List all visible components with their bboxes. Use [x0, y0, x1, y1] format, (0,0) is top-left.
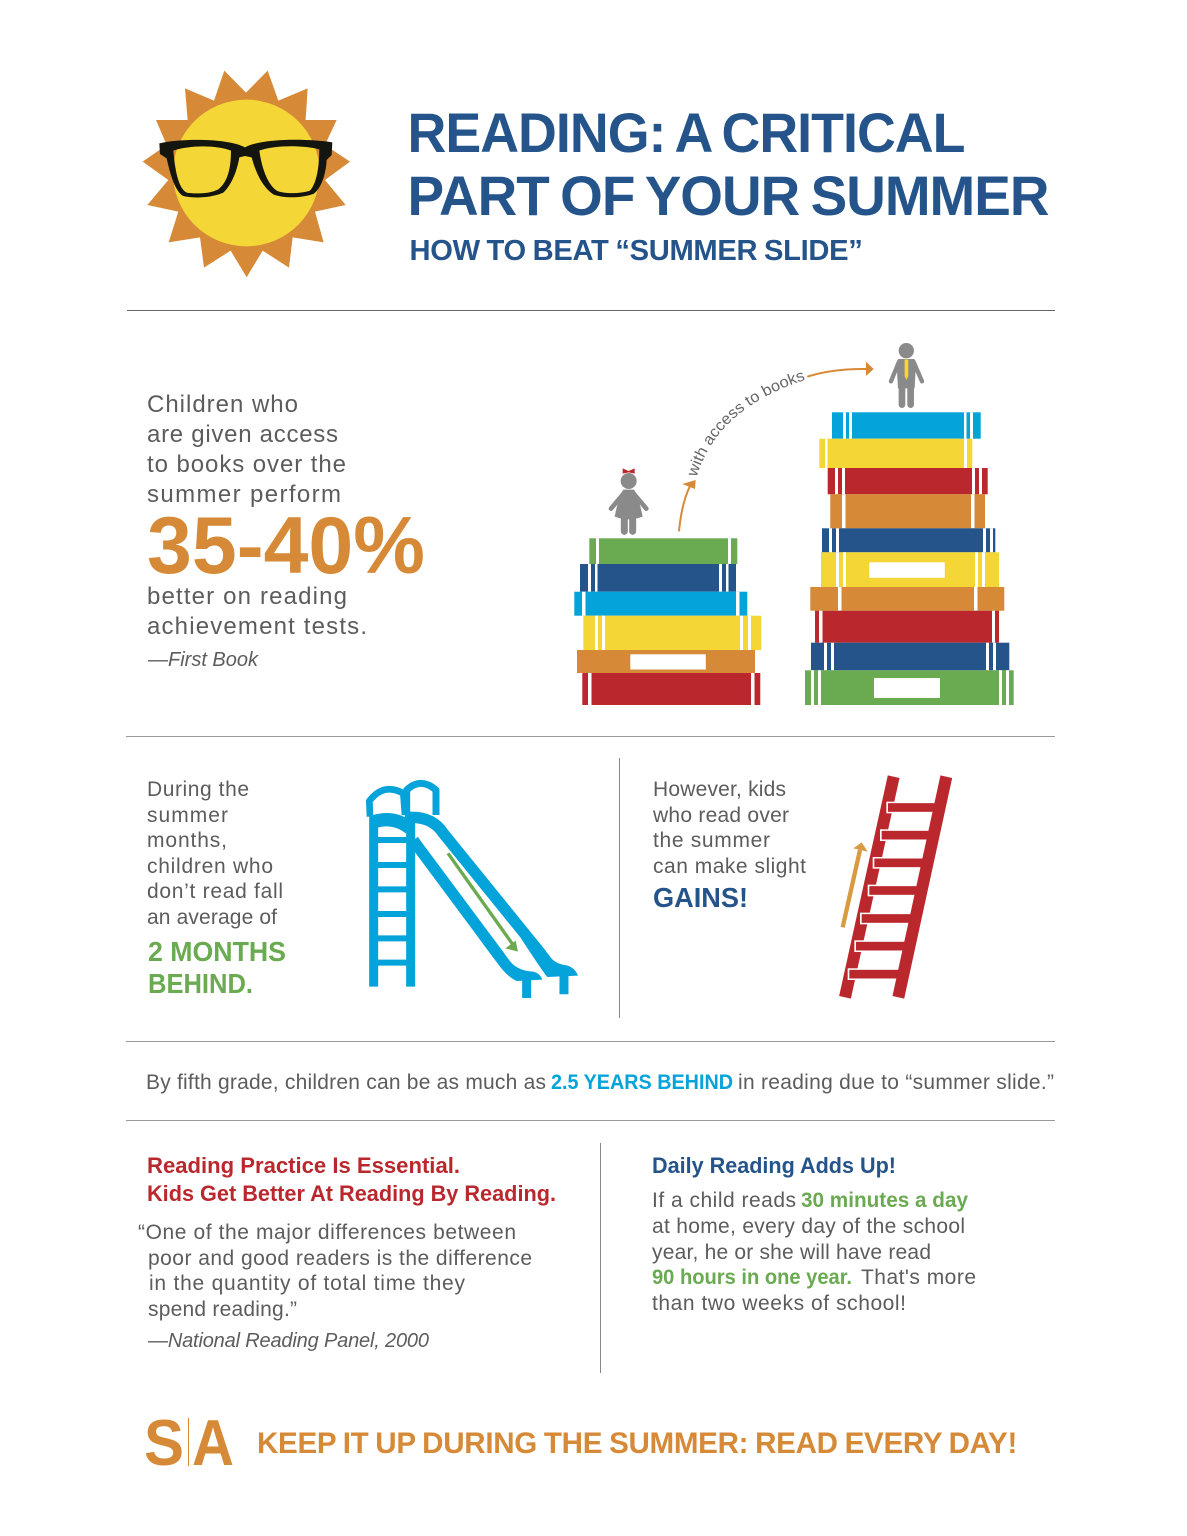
title	[408, 101, 1049, 267]
arrow: green downward arrow on slide	[448, 853, 518, 952]
text block: gains	[652, 778, 806, 913]
panel: reading practice: “One of the major differences between	[138, 1221, 516, 1244]
logo: SA	[144, 1406, 234, 1479]
callout: five grade statistic: By fifth grade, children can be as much as	[146, 1071, 546, 1094]
panel: daily reading: at home, every day of the school	[652, 1215, 965, 1238]
text block: summer slide	[147, 778, 286, 999]
text block: access to books statistic: are given access	[147, 421, 338, 448]
text block: summer slide: summer	[147, 804, 228, 827]
panel: daily reading	[652, 1153, 976, 1315]
text block: access to books statistic: achievement tests.	[147, 613, 367, 640]
text block: access to books statistic: better on reading	[147, 583, 347, 610]
text block: summer slide: an average of	[147, 906, 277, 929]
illustration: book stacks with figures	[574, 343, 1014, 705]
text block: access to books statistic: Children who	[147, 391, 298, 418]
panel: daily reading: Daily Reading Adds Up!	[652, 1153, 896, 1178]
text block: gains: can make slight	[653, 855, 806, 878]
text block: summer slide: don’t read fall	[147, 880, 283, 903]
text block: summer slide: BEHIND.	[148, 968, 253, 999]
text block: gains: who read over	[652, 804, 789, 827]
icon: playground slide	[369, 783, 578, 998]
text block: summer slide: children who	[147, 855, 273, 878]
title: READING: A CRITICAL	[408, 101, 964, 164]
icon: sun wearing glasses	[143, 71, 350, 277]
panel: daily reading: 30 minutes a day	[801, 1189, 968, 1212]
logo: SA: S	[144, 1406, 184, 1479]
text block: gains: the summer	[653, 829, 770, 852]
footer call to action: KEEP IT UP DURING THE SUMMER: READ EVERY DAY!	[257, 1427, 1017, 1460]
arrow: orange upward arrow	[843, 842, 868, 927]
panel: reading practice: poor and good readers is the difference	[148, 1247, 532, 1270]
panel: daily reading: 90 hours in one year.	[652, 1266, 852, 1289]
panel: reading practice: in the quantity of total time they	[149, 1272, 466, 1295]
panel: daily reading: than two weeks of school!	[652, 1292, 906, 1315]
text block: access to books statistic	[147, 391, 425, 671]
panel: daily reading: If a child reads	[652, 1189, 796, 1212]
callout: five grade statistic	[146, 1071, 1054, 1094]
text block: gains: GAINS!	[653, 882, 748, 913]
tall book stack	[805, 412, 1014, 705]
callout: five grade statistic: in reading due to “summer slide.”	[738, 1071, 1054, 1094]
title: HOW TO BEAT “SUMMER SLIDE”	[410, 235, 862, 267]
panel: reading practice	[138, 1153, 556, 1352]
text block: access to books statistic: —First Book	[147, 649, 259, 671]
text block: summer slide: 2 MONTHS	[148, 936, 286, 967]
text block: access to books statistic: summer perform	[147, 481, 341, 508]
logo: SA: A	[192, 1406, 234, 1479]
text block: access to books statistic: 35-40%	[147, 501, 425, 591]
callout: five grade statistic: 2.5 YEARS BEHIND	[551, 1071, 733, 1094]
text block: summer slide: months,	[147, 829, 227, 852]
panel: daily reading: That's more	[861, 1266, 976, 1289]
title: PART OF YOUR SUMMER	[408, 164, 1049, 227]
panel: reading practice: Reading Practice Is Essential.	[147, 1153, 460, 1178]
small book stack	[574, 538, 761, 705]
text block: access to books statistic: to books over the	[147, 451, 346, 478]
text block: gains: However, kids	[653, 778, 786, 801]
panel: reading practice: Kids Get Better At Reading By Reading.	[147, 1181, 556, 1206]
icon: red ladder with arrow	[843, 777, 946, 997]
icon: man figure with tie	[891, 343, 922, 405]
panel: reading practice: —National Reading Panel, 2000	[147, 1330, 429, 1352]
icon: girl figure	[611, 468, 646, 531]
panel: reading practice: spend reading.”	[148, 1298, 297, 1321]
arrow: curved arrow with access to books	[678, 362, 874, 532]
text block: summer slide: During the	[147, 778, 249, 801]
panel: daily reading: year, he or she will have read	[652, 1241, 931, 1264]
arrow: curved arrow with access to books: with access to books	[688, 372, 804, 475]
